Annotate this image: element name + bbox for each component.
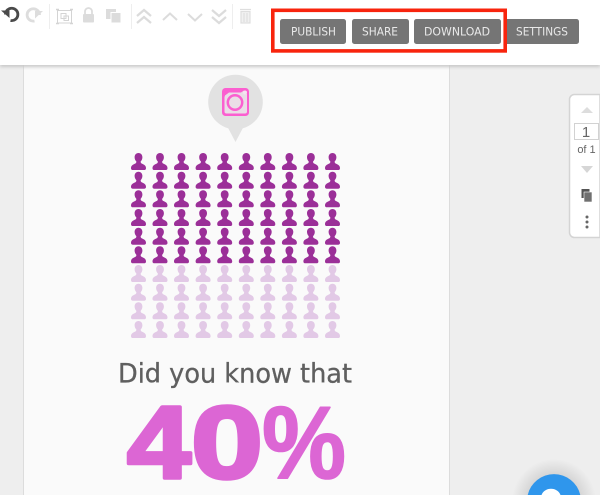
button: settings: SETTINGS <box>516 24 568 38</box>
chat button <box>512 459 596 495</box>
icon: send to back <box>212 10 226 23</box>
statistic: 40% <box>127 385 346 495</box>
icon: redo <box>27 9 43 21</box>
page count: of 1 <box>577 144 596 156</box>
heading: did you know that: Did you know that <box>118 358 352 390</box>
button: download: DOWNLOAD <box>424 24 490 38</box>
icon: lock <box>83 8 94 22</box>
icon: group <box>56 10 73 24</box>
icon: duplicate page <box>582 189 592 202</box>
icon: copy <box>106 9 121 23</box>
page navigator panel <box>570 94 600 238</box>
icon: bring to front <box>137 10 151 23</box>
page number box <box>574 124 598 140</box>
button: publish <box>280 19 346 44</box>
icon: move down <box>188 14 202 20</box>
canvas page <box>23 60 450 495</box>
icon: undo <box>1 8 18 21</box>
icon: page up <box>581 107 593 113</box>
button: publish: PUBLISH <box>291 24 336 38</box>
icon: trash <box>240 10 251 23</box>
icon: instagram map pin <box>208 75 263 142</box>
toolbar <box>0 0 600 67</box>
pictogram: 40 of 100 people light <box>131 265 340 338</box>
icon: move up <box>163 14 177 20</box>
highlight box <box>273 10 505 51</box>
button: share: SHARE <box>362 24 398 38</box>
icon: more options <box>586 216 588 228</box>
button: share <box>352 19 409 44</box>
icon: page down <box>581 166 593 173</box>
page number: 1 <box>582 124 590 141</box>
button: settings <box>503 19 579 44</box>
pictogram: 60 of 100 people dark <box>131 153 340 263</box>
button: download <box>414 19 501 44</box>
